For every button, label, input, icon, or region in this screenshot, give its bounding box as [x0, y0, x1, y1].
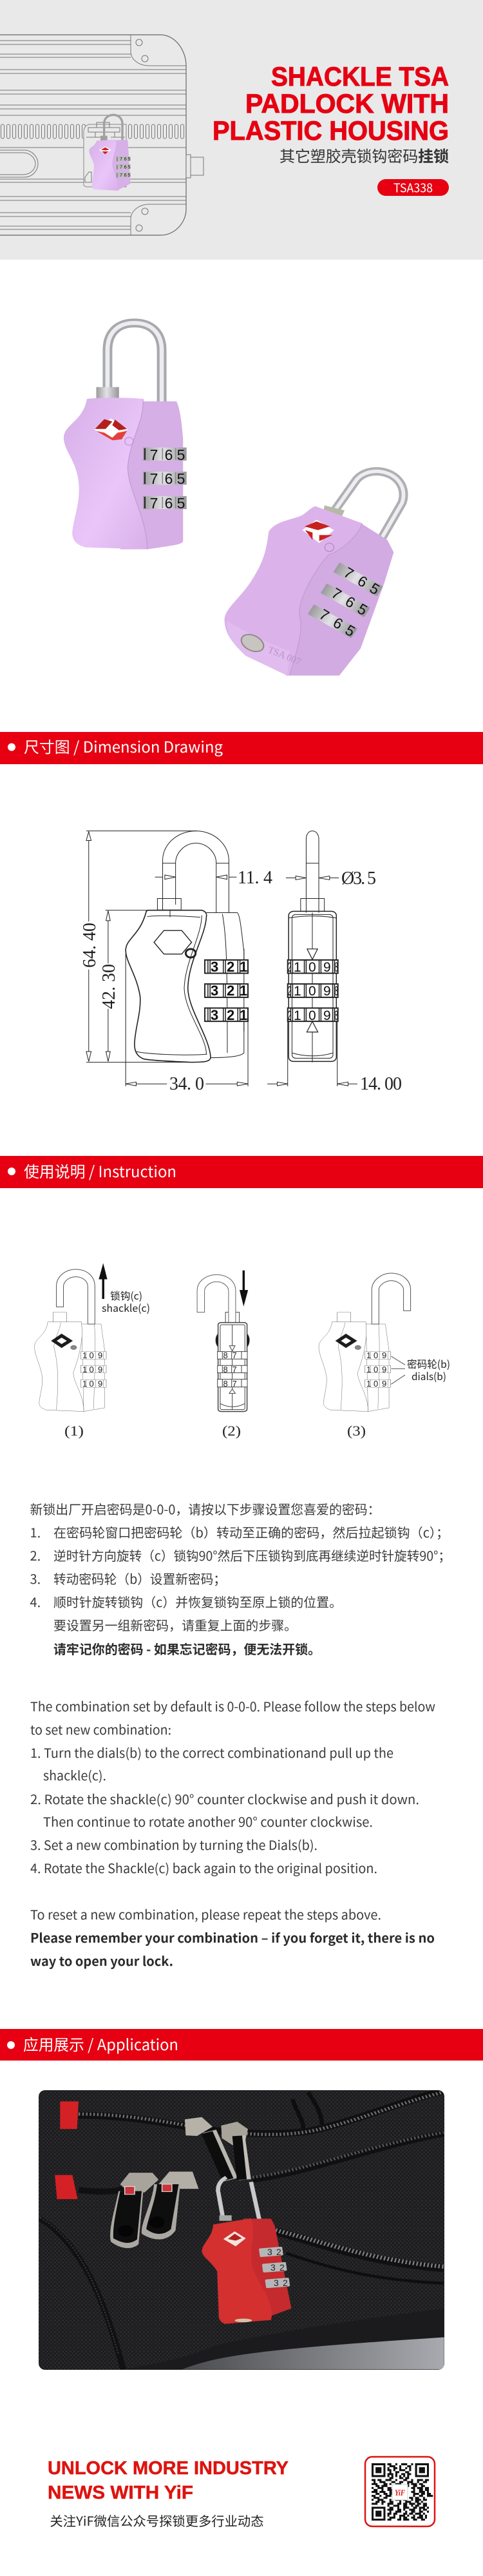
text block: English instructions: to set new combination:: [30, 1720, 171, 1738]
section bar: instruction: 使用说明 / Instruction: [24, 1159, 176, 1182]
step numbers: (1): [64, 1423, 84, 1439]
title: PADLOCK WITH: [245, 88, 449, 119]
text block: Chinese instructions: 新锁出厂开启密码是0-0-0，请按以下步骤设置您喜爱的密码：: [30, 1499, 380, 1518]
diagram 1: 109: [82, 1350, 102, 1360]
text block: Chinese instructions: 4.: [30, 1592, 41, 1611]
purple padlock angled view: TSA 007: [267, 645, 303, 668]
backpack seams and zippers: [40, 2091, 444, 2369]
text block: English instructions: 1. Turn the dials(b) to the correct combinationand pull up the: [30, 1743, 393, 1762]
dimension labels: 14. 00: [360, 1074, 402, 1094]
red padlock: [202, 2177, 291, 2324]
diagram 2: 87: [223, 1365, 237, 1374]
label: dials: dials(b): [412, 1368, 446, 1383]
text block: Chinese instructions: 2.: [30, 1546, 41, 1564]
diagram 3: 109: [366, 1379, 386, 1389]
label: shackle: shackle(c): [102, 1300, 150, 1315]
diagram 2: 87: [223, 1350, 237, 1360]
icon: small purple padlock on suitcase: |765: [117, 172, 130, 178]
purple padlock angled view: [225, 471, 404, 675]
section bar: application: [0, 2029, 483, 2061]
purple padlock front view: 765: [150, 470, 185, 487]
section bar: instruction: [0, 1156, 483, 1188]
diagram 1: 109: [82, 1379, 102, 1389]
dimension labels: 42. 30: [99, 964, 119, 1009]
step numbers: (2): [222, 1423, 241, 1439]
suitcase line drawing: [0, 35, 204, 235]
text block: Chinese instructions: 请牢记你的密码 - 如果忘记密码，便无法开锁。: [53, 1639, 321, 1658]
section bar: dimension drawing: [0, 732, 483, 764]
dial digits: side view: [288, 960, 338, 1023]
model badge: TSA338: [393, 179, 433, 196]
panel: application photo: [39, 2090, 444, 2370]
footer heading: [48, 2458, 289, 2503]
QR code: YiF: [395, 2488, 405, 2497]
dial digits: front view: 321: [211, 959, 247, 975]
text block: Chinese instructions: 3.: [30, 1569, 41, 1588]
diagram 2: [197, 1271, 249, 1412]
diagram 3: 109: [366, 1365, 386, 1374]
panel: header: [0, 0, 483, 260]
text block: English instructions: 2. Rotate the shackle(c) 90° counter clockwise and push it down.: [30, 1789, 419, 1808]
dial digits: side view: 2: [288, 984, 291, 999]
panel: application photo: 32: [267, 2247, 281, 2257]
dial digits: front view: 321: [211, 1007, 247, 1023]
text block: English instructions: The combination set by default is 0-0-0. Please follow the steps below: [30, 1697, 435, 1715]
purple padlock front view: 765: [150, 495, 185, 512]
chart: front and side technical drawing: [86, 831, 357, 1086]
dial digits: side view: 8: [335, 984, 338, 999]
icon: small purple padlock on suitcase: |765: [117, 164, 130, 169]
title: PLASTIC HOUSING: [213, 115, 449, 146]
text block: Chinese instructions: 1.: [30, 1523, 41, 1541]
text block: Chinese instructions: [30, 1499, 451, 1658]
panel: dimension drawing: [80, 831, 402, 1094]
diagram 1: [35, 1264, 107, 1412]
footer heading: NEWS WITH YiF: [48, 2483, 193, 2503]
panel: application photo: 32: [274, 2278, 288, 2288]
text block: English instructions: way to open your lock.: [30, 1951, 173, 1970]
dial digits: front view: [211, 959, 247, 1023]
text block: English instructions: [30, 1697, 435, 1970]
subtitle: 其它塑胶壳锁钩密码挂锁: [279, 144, 449, 166]
text block: English instructions: 3. Set a new combination by turning the Dials(b).: [30, 1835, 317, 1854]
dial digits: side view: 109: [294, 984, 331, 999]
diagram 2: 87: [223, 1379, 237, 1389]
diagram 3: [319, 1273, 411, 1412]
purple padlock front view: 765: [150, 447, 185, 463]
text block: Chinese instructions: 要设置另一组新密码，请重复上面的步骤。: [53, 1615, 297, 1634]
section bar: application: 应用展示 / Application: [23, 2032, 178, 2055]
model badge: [377, 179, 449, 196]
label: shackle: [102, 1287, 150, 1315]
dial digits: side view: 8: [335, 960, 338, 975]
step numbers: (3): [347, 1423, 366, 1439]
dial digits: front view: 321: [211, 983, 247, 999]
panel: instruction diagrams: [35, 1264, 450, 1439]
panel: product photos: [64, 323, 404, 675]
text block: Chinese instructions: 转动密码轮（b）设置新密码；: [53, 1569, 226, 1588]
zipper pulls: [110, 2117, 248, 2248]
label: dials: [407, 1356, 450, 1383]
panel: application photo: 32: [270, 2262, 285, 2273]
diagram 3: 109: [366, 1350, 386, 1360]
text block: English instructions: Please remember your combination – if you forget it, there is no: [30, 1928, 435, 1946]
title: [213, 61, 449, 146]
dimension labels: 11. 4: [238, 868, 272, 888]
footer caption: 关注YiF微信公众号探锁更多行业动态: [50, 2511, 264, 2530]
icon: small purple padlock on suitcase: [89, 115, 131, 191]
dial digits: side view: 109: [294, 960, 331, 975]
purple padlock angled view: 765: [316, 606, 358, 640]
dial digits: side view: 109: [294, 1008, 331, 1023]
dimension labels: 34. 0: [169, 1074, 204, 1094]
footer heading: UNLOCK MORE INDUSTRY: [48, 2458, 289, 2479]
title: SHACKLE TSA: [271, 61, 449, 91]
dimension labels: Ø3. 5: [341, 869, 376, 889]
text block: English instructions: Then continue to rotate another 90° counter clockwise.: [43, 1812, 373, 1831]
text block: Chinese instructions: 顺时针旋转锁钩（c）并恢复锁钩至原上锁的位置。: [53, 1592, 342, 1611]
dial digits: side view: 2: [288, 960, 291, 975]
text block: Chinese instructions: 逆时针方向旋转（c）锁钩90°然后下压锁钩到底再继续逆时针旋转90°；: [53, 1546, 451, 1564]
dial digits: side view: 2: [288, 1008, 291, 1023]
text block: English instructions: To reset a new combination, please repeat the steps above.: [30, 1905, 381, 1923]
dimension labels: 64. 40: [80, 923, 100, 968]
dial digits: side view: 8: [335, 1008, 338, 1023]
purple padlock front view: [64, 323, 187, 550]
label: dials: 密码轮(b): [407, 1356, 450, 1371]
step numbers: [64, 1423, 366, 1439]
label: shackle: 锁钩(c): [110, 1287, 142, 1303]
text block: English instructions: 4. Rotate the Shackle(c) back again to the original position.: [30, 1858, 377, 1877]
text block: Chinese instructions: 在密码轮窗口把密码轮（b）转动至正确的密码，然后拉起锁钩（c）；: [53, 1523, 449, 1541]
dimension labels: [80, 868, 402, 1094]
text block: English instructions: shackle(c).: [43, 1765, 106, 1784]
purple padlock angled view: 765: [328, 584, 370, 619]
section bar: dimension drawing: 尺寸图 / Dimension Drawing: [24, 735, 223, 757]
diagram 1: 109: [82, 1365, 102, 1374]
QR code: [365, 2457, 435, 2526]
panel: footer: [48, 2457, 435, 2530]
icon: small purple padlock on suitcase: |765: [117, 156, 130, 162]
purple padlock angled view: 765: [341, 564, 383, 598]
